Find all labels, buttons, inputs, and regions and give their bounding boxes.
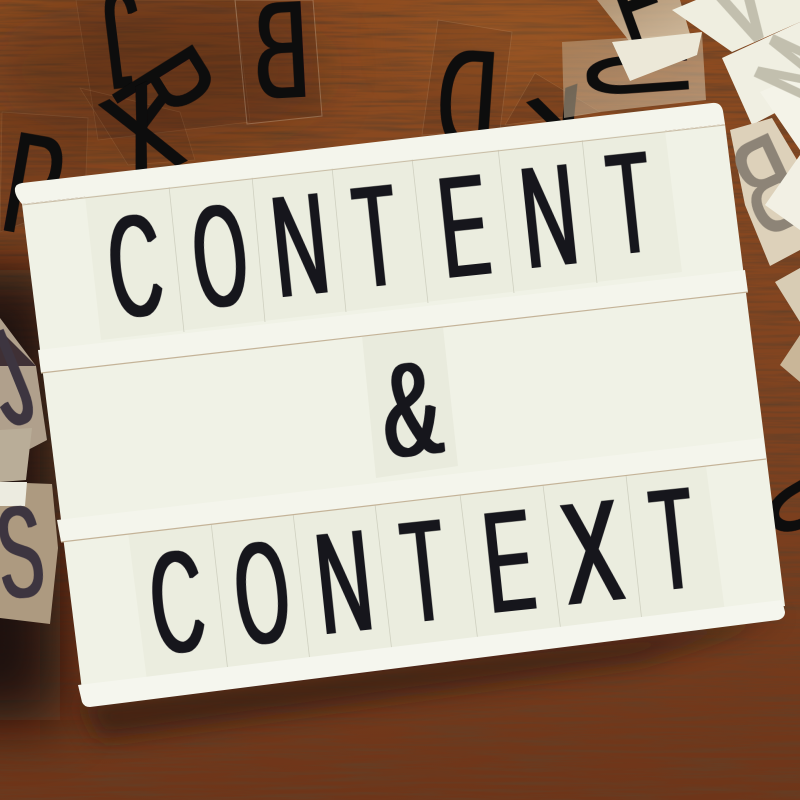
- letter X fragment: X: [515, 57, 619, 214]
- scattered acetate letters: top centre: [422, 17, 619, 214]
- rail: lower middle: [57, 438, 766, 542]
- scattered sheets: left side: [0, 300, 58, 627]
- headline row: CONTEXT: T: [644, 457, 702, 623]
- headline row: CONTENT: E: [432, 144, 497, 310]
- headline row: CONTENT: N: [514, 133, 585, 300]
- letter D mirrored: D: [433, 17, 501, 183]
- headline row: CONTENT: [101, 121, 659, 350]
- headline row: CONTEXT: [143, 457, 702, 686]
- letter R: R: [84, 24, 246, 156]
- rail: bottom: [78, 600, 785, 707]
- light board: [15, 103, 785, 707]
- letter X: X: [84, 55, 200, 212]
- headline row: CONTEXT: O: [227, 510, 297, 677]
- scattered sheets: right side: [711, 104, 800, 560]
- white sheets: [672, 0, 800, 52]
- headline row: CONTENT: T: [601, 121, 659, 287]
- scattered acetate letters: top left: [0, 0, 322, 269]
- panel: top row tiles: [85, 130, 682, 340]
- ampersand row: &: [374, 332, 448, 486]
- headline row: CONTEXT: C: [143, 519, 212, 686]
- scattered acetate letters: top right: [555, 0, 800, 150]
- panel: ampersand tile: [362, 327, 458, 478]
- headline row: CONTEXT: X: [555, 470, 629, 636]
- headline row: CONTENT: T: [347, 154, 405, 320]
- headline row: CONTEXT: T: [395, 489, 453, 655]
- board body: [22, 124, 785, 690]
- rail: top: [15, 103, 725, 204]
- letter U on its side: U: [555, 46, 721, 102]
- rail: upper middle: [38, 270, 748, 373]
- headline row: CONTEXT: E: [477, 479, 542, 645]
- headline row: CONTEXT: N: [309, 499, 380, 666]
- headline row: CONTENT: C: [101, 183, 170, 350]
- headline row: CONTENT: O: [185, 173, 255, 340]
- panel: bottom row tiles: [128, 466, 725, 681]
- headline row: CONTENT: N: [265, 162, 336, 329]
